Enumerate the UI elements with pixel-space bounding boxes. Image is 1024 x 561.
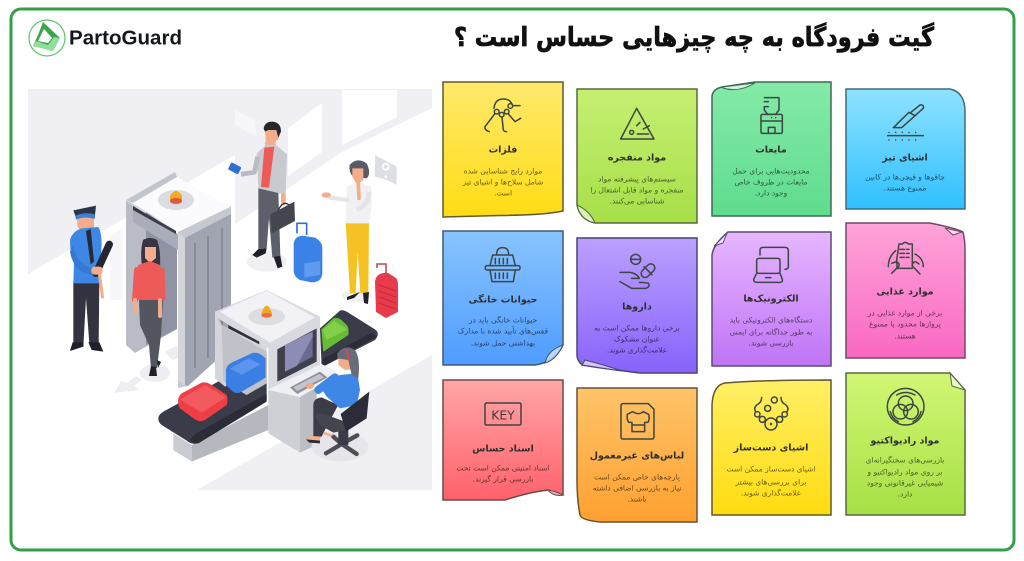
text: sharp objects: چاقوها و قیچی‌ها در کابین: [865, 172, 945, 182]
text: electronics: دستگاه‌های الکترونیکی باید: [730, 316, 812, 324]
text: handicrafts: اشیای دست‌ساز ممکن است: [726, 464, 816, 474]
logo wordmark: PartoGuard: [69, 26, 182, 50]
icon: metal chain: [485, 99, 521, 132]
text: pets: قفس‌های تأیید شده با مدارک: [458, 326, 548, 336]
text: medicines: برخی داروها ممکن است به: [594, 324, 680, 332]
man with phone and briefcase: [228, 110, 397, 282]
text: explosives: شناسایی می‌کنند.: [610, 196, 664, 206]
logo emblem: [29, 20, 65, 56]
heading: liquids: مایعات: [755, 144, 787, 156]
text: unusual clothing: باشند.: [627, 494, 647, 504]
seated operator: [306, 347, 369, 461]
text: radioactive: دارد.: [898, 490, 912, 498]
metal detector gate: [126, 172, 231, 388]
heading: pets: حیوانات خانگی: [468, 294, 538, 306]
text: medicines: عنوان مشکوک: [614, 334, 660, 344]
panel: documents: [443, 380, 563, 500]
feet of woman in yellow: [347, 292, 369, 304]
panel: electronics: [712, 232, 831, 366]
heading: metals: فلزات: [489, 144, 517, 156]
heading: explosives: مواد منفجره: [608, 152, 666, 164]
text: metals: موارد رایج شناسایی شده: [464, 166, 542, 176]
text: electronics: به طور جداگانه برای ایمنی: [730, 328, 812, 336]
heading: electronics: الکترونیک‌ها: [743, 294, 799, 304]
red suitcase standing: [375, 264, 398, 318]
text: handicrafts: برای بررسی‌های بیشتر: [735, 478, 806, 486]
panel: unusual clothing: [577, 388, 697, 522]
panel: pets: [443, 231, 563, 365]
icon: knife: [888, 105, 923, 140]
text: pets: حیوانات خانگی باید در: [468, 316, 537, 324]
baggage scanner and conveyor: [158, 290, 378, 462]
icon: key label: KEY: [491, 408, 515, 422]
text: food: پروازها محدود یا ممنوع: [869, 320, 941, 328]
heading: medicines: داروها: [622, 302, 652, 312]
panel: explosives: [577, 89, 697, 223]
text: food: هستند.: [894, 332, 916, 340]
illustration floor background: [28, 89, 432, 490]
text: pets: بهداشتی حمل شوند.: [471, 338, 535, 348]
text: unusual clothing: پارچه‌های خاص ممکن است: [594, 472, 680, 482]
icon: pet carrier: [485, 248, 520, 282]
panel: radioactive: [846, 373, 965, 515]
heading: sharp objects: اشیای تیز: [881, 152, 928, 164]
panel: liquids: [712, 82, 831, 216]
text: unusual clothing: نیاز به بازرسی اضافی داشته: [593, 484, 681, 492]
text: metals: شامل سلاح‌ها و اشیای تیز: [462, 178, 543, 186]
icon: biohazard: [887, 388, 924, 425]
icon: explosive warning triangle: [621, 108, 654, 139]
heading: unusual clothing: لباس‌های غیرمعمول: [590, 450, 684, 462]
text: handicrafts: علامت‌گذاری شوند.: [741, 488, 801, 498]
panel: metals: [443, 82, 563, 217]
icon: necklace: [755, 397, 788, 430]
guard: [70, 206, 109, 352]
icon: water cooler: [761, 98, 782, 133]
text: electronics: بازرسی شوند.: [748, 338, 794, 348]
title: گیت فرودگاه به چه چیزهایی حساس است ؟: [454, 22, 935, 53]
icon: laptop and tablet: [754, 247, 788, 282]
text: radioactive: بازرسی‌های سختگیرانه‌ای: [866, 456, 944, 464]
text: explosives: منفجره و مواد قابل اشتعال را: [590, 186, 684, 194]
illustration: airport security checkpoint: [28, 89, 432, 490]
text: liquids: وجود دارد.: [755, 188, 788, 198]
text: explosives: سیستم‌های پیشرفته مواد: [598, 174, 676, 184]
panel: handicrafts: [712, 380, 831, 515]
text: documents: اسناد امنیتی ممکن است تحت: [456, 464, 550, 472]
heading: documents: اسناد حساس: [472, 444, 534, 454]
panel: sharp objects: [846, 89, 965, 209]
text: liquids: مایعات در ظروف خاص: [735, 178, 807, 186]
heading: handicrafts: اشیای دست‌ساز: [733, 442, 808, 454]
text: liquids: محدودیت‌هایی برای حمل: [732, 166, 810, 176]
text: sharp objects: ممنوع هستند.: [884, 184, 926, 192]
woman passing gate: [135, 238, 163, 376]
woman in yellow trousers: [322, 160, 372, 302]
text: radioactive: شیمیایی غیرقانونی وجود: [867, 478, 943, 488]
text: medicines: علامت‌گذاری شوند.: [607, 346, 667, 354]
heading: food: موارد غذایی: [876, 286, 934, 298]
text: food: برخی از موارد غذایی در: [867, 308, 942, 318]
heading: radioactive: مواد رادیواکتیو: [870, 436, 940, 446]
panel: food: [846, 223, 965, 358]
logo: PartoGuard: [29, 20, 182, 56]
panel: medicines: [577, 238, 697, 373]
icon: shirt in frame: [621, 404, 654, 439]
icon: pills in hand: [620, 254, 656, 288]
text: metals: است.: [494, 188, 512, 198]
text: radioactive: بر روی مواد رادیواکتیو و: [867, 468, 942, 476]
text: documents: بازرسی قرار گیرند.: [473, 474, 533, 484]
icon: hands holding list: [888, 242, 923, 274]
